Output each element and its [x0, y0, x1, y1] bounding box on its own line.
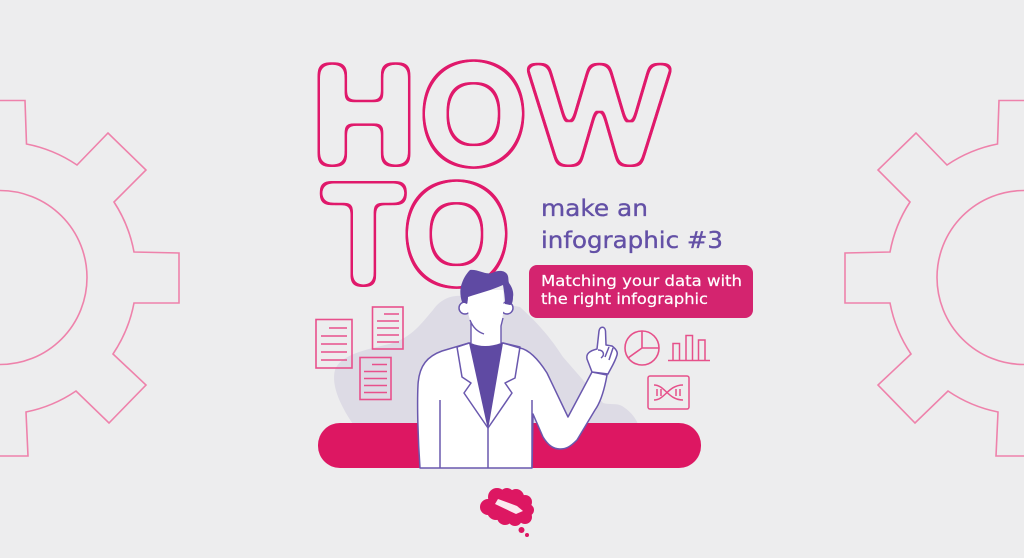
title: HOW: W: [530, 38, 668, 191]
subtitle: infographic #3: [541, 228, 723, 254]
subtitle: [541, 196, 723, 254]
title: TO: T: [324, 159, 403, 308]
hair: [460, 270, 513, 305]
lapels and coat lines: [440, 343, 532, 468]
title: HOW: O: [423, 39, 524, 189]
icon: brain logo: [480, 488, 534, 537]
callout: matching your data: Matching your data with: [541, 272, 742, 290]
title: HOW: [315, 38, 668, 191]
coat and arm: [418, 343, 607, 468]
title: HOW: H: [315, 43, 413, 187]
icon: bar chart: [668, 336, 710, 360]
callout: matching your data: [529, 265, 753, 318]
icon: document 1: [316, 320, 352, 368]
shirt: [469, 343, 503, 430]
icon: document 3: [360, 358, 391, 400]
title: TO: O: [406, 159, 507, 309]
hand: [587, 327, 617, 374]
callout: matching your data: the right infographic: [541, 290, 708, 308]
pink bar: [318, 423, 701, 468]
icon: pie chart: [625, 331, 659, 365]
icon: DNA box: [648, 376, 689, 409]
ears: [459, 302, 513, 314]
subtitle: make an: [541, 196, 648, 222]
person: [418, 270, 617, 468]
icon: right gear: [845, 100, 1024, 456]
icon: document 2: [372, 307, 403, 349]
icon: left gear: [0, 100, 179, 456]
background blob: [334, 296, 638, 424]
title: TO: [324, 159, 507, 309]
neck and face: [467, 290, 504, 346]
